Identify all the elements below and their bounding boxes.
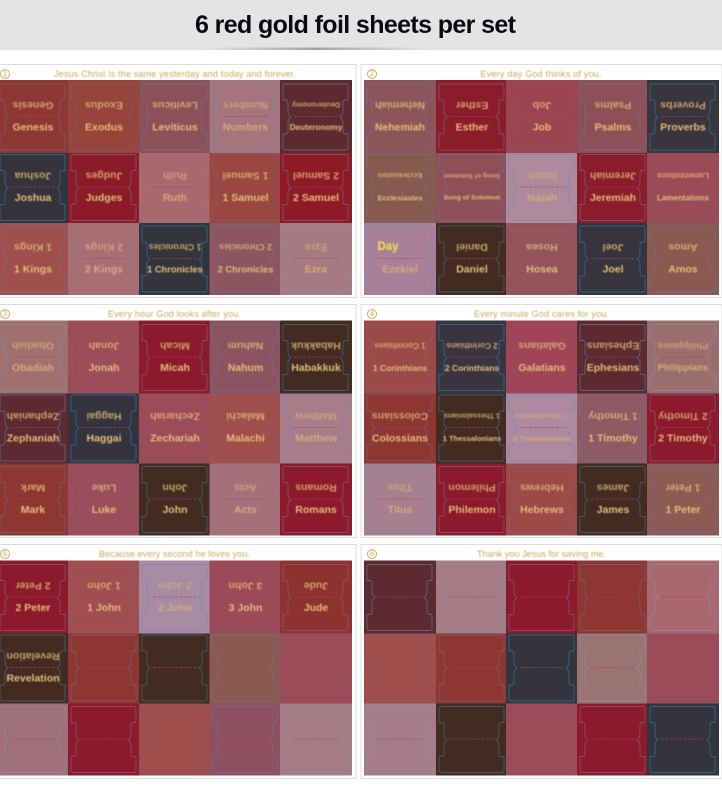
blank tile: row 1 column 2	[436, 560, 508, 634]
caption: sheet 4: Every minute God cares for you.	[474, 309, 609, 319]
panel: sheet 3	[0, 304, 356, 538]
tile: Romans	[280, 464, 352, 536]
tile: 1 Corinthians: 1 Corinthians	[374, 341, 426, 350]
tile: Hebrews: Hebrews	[520, 504, 564, 516]
tile: 1 John	[68, 560, 140, 634]
blank tile: row 2 column 4	[210, 634, 282, 704]
panel: sheet 1	[0, 64, 356, 298]
tile: Galatians	[506, 320, 578, 394]
tile: Zephaniah: Zephaniah	[7, 432, 59, 444]
tile: Joel: Joel	[602, 264, 624, 276]
tile: 2 Timothy	[647, 394, 719, 464]
tile: Isaiah: Isaiah	[527, 170, 557, 182]
tile: James	[577, 464, 649, 536]
tile: Jude	[280, 560, 352, 634]
tile: Mark	[0, 464, 69, 536]
blank tile: row 3 column 4	[577, 704, 649, 776]
tile: Ecclesiastes: Ecclesiastes	[377, 194, 423, 202]
tile: 3 John: 3 John	[229, 580, 262, 592]
tile: Hosea: Hosea	[526, 241, 558, 253]
tile: Colossians: Colossians	[372, 410, 428, 422]
blank tile: row 2 column 4	[577, 634, 649, 704]
blank tile: row 3 column 4	[210, 704, 282, 776]
tile: Isaiah: Isaiah	[527, 192, 557, 204]
tile: James: James	[596, 482, 629, 494]
tile: Hosea: Hosea	[526, 264, 558, 276]
caption: sheet 3: Every hour God looks after you.	[108, 309, 241, 319]
tile: Isaiah	[506, 153, 578, 223]
tile: Lamentations	[647, 153, 719, 223]
tile: Proverbs: Proverbs	[660, 122, 706, 134]
tile: Ephesians: Ephesians	[587, 362, 639, 374]
tile: Jude: Jude	[304, 580, 328, 592]
tile: Nahum: Nahum	[228, 362, 263, 374]
tile: Ezra	[280, 223, 352, 295]
tile: Lamentations: Lamentations	[657, 194, 710, 202]
blank tile: row 3 column 3	[506, 704, 578, 776]
tile: Titus: Titus	[388, 504, 413, 516]
tile: Judges	[68, 153, 140, 223]
tile: Romans: Romans	[295, 482, 337, 494]
tile: Leviticus: Leviticus	[152, 122, 198, 134]
tile: Ezra: Ezra	[305, 264, 327, 276]
tile: 1 Thessalonians: 1 Thessalonians	[443, 434, 501, 443]
tile: Ecclesiastes	[364, 153, 436, 223]
tile: Acts: Acts	[234, 482, 257, 494]
tile: 1 Samuel: 1 Samuel	[222, 192, 269, 204]
tile: 2 Peter: 2 Peter	[15, 602, 51, 614]
tile: Daniel: Daniel	[456, 241, 488, 253]
tile: Zephaniah	[0, 394, 69, 464]
tile: Nahum	[210, 320, 282, 394]
blank tile: row 2 column 2	[436, 634, 508, 704]
tile: Galatians: Galatians	[518, 340, 566, 352]
tile: 3 John	[210, 560, 282, 634]
icon: number 1	[0, 70, 10, 78]
tile: Song of Solomon: Song of Solomon	[444, 172, 500, 179]
tile: Joshua: Joshua	[14, 170, 51, 182]
tile: Philemon: Philemon	[448, 504, 496, 516]
tile: Revelation: Revelation	[6, 650, 60, 662]
tile: 1 Kings: 1 Kings	[14, 241, 52, 253]
tile: Jonah: Jonah	[89, 362, 119, 374]
tile: Daniel	[436, 223, 508, 295]
tile: Leviticus: Leviticus	[152, 99, 198, 111]
tile: 2 Corinthians	[436, 320, 508, 394]
caption: sheet 2: Every day God thinks of you.	[480, 69, 602, 79]
blank tile: row 3 column 1	[364, 704, 436, 776]
tile: Obadiah	[0, 320, 69, 394]
tile: Titus	[364, 464, 436, 536]
tile: 2 Corinthians: 2 Corinthians	[446, 341, 498, 350]
caption: sheet 6: Thank you Jesus for saving me.	[477, 549, 606, 559]
tile: Ezra: Ezra	[305, 241, 327, 253]
tile: Ezekiel with Day label	[364, 223, 436, 295]
tile: Matthew: Matthew	[294, 410, 337, 422]
tile: 1 Corinthians	[364, 320, 436, 394]
tile: Habakkuk	[280, 320, 352, 394]
tile: Amos	[647, 223, 719, 295]
tile: 2 Chronicles: 2 Chronicles	[218, 264, 273, 274]
tile: Jeremiah	[577, 153, 649, 223]
tile: 1 Timothy: 1 Timothy	[588, 432, 638, 444]
tile: 1 Thessalonians: 1 Thessalonians	[444, 412, 500, 420]
panel: sheet 2	[361, 64, 722, 298]
tile: Luke: Luke	[92, 504, 116, 516]
icon: number 2	[368, 70, 376, 78]
icon: number 3: 3	[3, 310, 8, 318]
tile: Philemon: Philemon	[448, 482, 496, 494]
tile: Romans: Romans	[295, 504, 337, 516]
tile: Ezekiel with Day label: Day	[377, 241, 399, 253]
tile: 2 Corinthians: 2 Corinthians	[445, 363, 499, 373]
tile: Ruth	[139, 153, 211, 223]
tile: 2 Samuel	[280, 153, 352, 223]
tile: 1 Peter	[647, 464, 719, 536]
icon: number 3	[0, 310, 10, 318]
tile: Ruth: Ruth	[163, 192, 187, 204]
tile: James: James	[597, 504, 630, 516]
blank tile: row 1 column 5	[647, 560, 719, 634]
tile: Philippians	[647, 320, 719, 394]
tile: 2 Thessalonians: 2 Thessalonians	[514, 412, 570, 420]
tile: Daniel: Daniel	[456, 264, 488, 276]
tile: Zephaniah: Zephaniah	[7, 410, 59, 422]
blank tile: row 2 column 5	[280, 634, 352, 704]
tile: Amos: Amos	[668, 241, 698, 253]
icon: number 5: 5	[3, 550, 8, 558]
tile: Galatians: Galatians	[518, 362, 566, 374]
tile: 1 Peter: 1 Peter	[665, 482, 701, 494]
tile: Jonah: Jonah	[89, 340, 119, 352]
tile: Nehemiah: Nehemiah	[375, 122, 425, 134]
tile: Nehemiah	[364, 80, 436, 153]
panel: sheet 5	[0, 544, 356, 778]
tile: Leviticus	[139, 80, 211, 153]
tile: Colossians	[364, 394, 436, 464]
tile: Genesis: Genesis	[13, 122, 54, 134]
tile: Philemon	[436, 464, 508, 536]
tile: Obadiah: Obadiah	[12, 340, 54, 352]
icon: number 4	[368, 310, 376, 318]
tile: 1 Chronicles	[139, 223, 211, 295]
tile: Haggai	[68, 394, 140, 464]
icon: number 1: 1	[3, 70, 8, 78]
tile: Esther: Esther	[456, 122, 488, 134]
tile: 2 Kings: 2 Kings	[85, 241, 123, 253]
blank tile: row 3 column 2	[68, 704, 140, 776]
tile: Deuteronomy: Deuteronomy	[290, 123, 343, 132]
tile: Genesis	[0, 80, 69, 153]
blank tile: row 2 column 5	[647, 634, 719, 704]
tile: 1 Corinthians: 1 Corinthians	[373, 363, 427, 373]
tile: Ephesians: Ephesians	[587, 340, 639, 352]
icon: number 6: 6	[370, 550, 375, 558]
tile: 2 Timothy: 2 Timothy	[658, 410, 708, 422]
tile: 2 Samuel: 2 Samuel	[293, 192, 339, 204]
tile: Esther: Esther	[456, 99, 488, 111]
tile: Genesis: Genesis	[12, 99, 53, 111]
tile: Haggai: Haggai	[86, 410, 122, 422]
tile: Luke: Luke	[92, 482, 116, 494]
blank tile: row 3 column 3	[139, 704, 211, 776]
tile: John: John	[162, 504, 188, 516]
tile: Proverbs: Proverbs	[660, 99, 706, 111]
tile: 1 John: 1 John	[87, 580, 121, 592]
tile: Titus: Titus	[387, 482, 412, 494]
tile: 1 John: 1 John	[87, 602, 121, 614]
tile: 3 John: 3 John	[229, 602, 262, 614]
tile: Malachi: Malachi	[226, 432, 265, 444]
blank tile: row 1 column 1	[364, 560, 436, 634]
blank tile: row 1 column 4	[577, 560, 649, 634]
tile: Proverbs	[647, 80, 719, 153]
tile: Hebrews: Hebrews	[520, 482, 564, 494]
tile: Joel	[577, 223, 649, 295]
tile: Acts	[210, 464, 282, 536]
tile: 1 Kings: 1 Kings	[14, 264, 52, 276]
blank tile: row 1 column 3	[506, 560, 578, 634]
tile: Philippians: Philippians	[658, 340, 708, 351]
tile: Acts: Acts	[234, 504, 257, 516]
tile: 2 Thessalonians	[506, 394, 578, 464]
tile: Song of Solomon	[436, 153, 508, 223]
tile: Judges: Judges	[85, 170, 122, 182]
tile: Hebrews	[506, 464, 578, 536]
tile: Exodus: Exodus	[85, 99, 123, 111]
tile: 2 Chronicles: 2 Chronicles	[219, 242, 272, 252]
title: 6 red gold foil sheets per set	[195, 11, 517, 39]
tile: Malachi	[210, 394, 282, 464]
tile: Joshua	[0, 153, 69, 223]
tile: Micah	[139, 320, 211, 394]
tile: Nehemiah: Nehemiah	[375, 99, 425, 111]
tile: 1 Timothy	[577, 394, 649, 464]
tile: Song of Solomon: Song of Solomon	[444, 194, 500, 202]
tile: Joel: Joel	[602, 241, 624, 253]
tile: 1 Chronicles: 1 Chronicles	[149, 242, 201, 252]
tile: Deuteronomy: Deuteronomy	[291, 100, 340, 110]
tile: Jude: Jude	[304, 602, 328, 614]
tile: 2 John	[139, 560, 211, 634]
tile: Ephesians	[577, 320, 649, 394]
tile: Hosea	[506, 223, 578, 295]
tile: Numbers: Numbers	[223, 99, 268, 111]
tile: Habakkuk: Habakkuk	[291, 340, 341, 352]
tile: Micah: Micah	[160, 362, 190, 374]
blank tile: row 3 column 5	[280, 704, 352, 776]
tile: Habakkuk: Habakkuk	[291, 362, 341, 374]
tile: Psalms	[577, 80, 649, 153]
blank tile: row 2 column 3	[139, 634, 211, 704]
tile: Numbers: Numbers	[223, 122, 268, 134]
blank tile: row 2 column 3	[506, 634, 578, 704]
tile: 2 Samuel: 2 Samuel	[293, 170, 339, 182]
tile: Ezekiel with Day label: Ezekiel	[382, 264, 418, 276]
tile: 2 Kings: 2 Kings	[85, 264, 123, 276]
tile: Colossians: Colossians	[372, 432, 428, 444]
header band	[0, 0, 722, 50]
tile: Psalms: Psalms	[595, 122, 632, 134]
tile: Luke	[68, 464, 140, 536]
icon: number 6	[368, 550, 376, 558]
tile: Zechariah	[139, 394, 211, 464]
icon: number 4: 4	[370, 310, 375, 318]
tile: Exodus: Exodus	[85, 122, 123, 134]
tile: Mark: Mark	[21, 504, 45, 516]
blank tile: row 3 column 1	[0, 704, 69, 776]
tile: 1 Samuel	[210, 153, 282, 223]
tile: Jeremiah: Jeremiah	[590, 170, 636, 182]
tile: Matthew: Matthew	[295, 432, 338, 444]
blank tile: row 3 column 5	[647, 704, 719, 776]
tile: Lamentations: Lamentations	[656, 171, 709, 180]
caption: sheet 1: Jesus Christ is the same yesterday and today and forever.	[54, 69, 296, 79]
tile: Zechariah: Zechariah	[150, 432, 200, 444]
tile: 1 Timothy: 1 Timothy	[588, 410, 638, 422]
tile: Nahum: Nahum	[228, 340, 263, 352]
tile: Revelation: Revelation	[6, 672, 60, 684]
tile: Job	[506, 80, 578, 153]
tile: 2 Thessalonians: 2 Thessalonians	[513, 434, 571, 443]
tile: Numbers	[210, 80, 282, 153]
tile: John	[139, 464, 211, 536]
tile: 2 John: 2 John	[158, 580, 192, 592]
tile: Mark: Mark	[21, 482, 45, 494]
tile: 2 John: 2 John	[158, 602, 192, 614]
tile: 2 Kings	[68, 223, 140, 295]
tile: 2 Peter	[0, 560, 69, 634]
tile: 2 Timothy: 2 Timothy	[658, 432, 708, 444]
tile: Matthew	[280, 394, 352, 464]
icon: number 5	[0, 550, 10, 558]
tile: 1 Thessalonians	[436, 394, 508, 464]
tile: Jeremiah: Jeremiah	[590, 192, 636, 204]
tile: Jonah	[68, 320, 140, 394]
tile: Ecclesiastes: Ecclesiastes	[377, 171, 423, 180]
tile: John: John	[162, 482, 188, 494]
blank tile: row 2 column 1	[364, 634, 436, 704]
tile: Deuteronomy	[280, 80, 352, 153]
tile: 1 Peter: 1 Peter	[665, 504, 701, 516]
tile: Obadiah: Obadiah	[12, 362, 54, 374]
tile: Zechariah: Zechariah	[150, 410, 200, 422]
blank tile: row 2 column 2	[68, 634, 140, 704]
blank tile: row 3 column 2	[436, 704, 508, 776]
tile: 2 Chronicles	[210, 223, 282, 295]
tile: 2 Peter: 2 Peter	[15, 580, 51, 592]
tile: Philippians: Philippians	[658, 362, 708, 374]
tile: Malachi: Malachi	[226, 410, 265, 422]
tile: Job: Job	[533, 99, 551, 111]
tile: Amos: Amos	[668, 264, 698, 276]
tile: Job: Job	[533, 122, 551, 134]
panel: sheet 6	[361, 544, 722, 778]
tile: Ruth: Ruth	[163, 170, 187, 182]
tile: 1 Samuel: 1 Samuel	[222, 170, 269, 182]
tile: Joshua: Joshua	[15, 192, 52, 204]
caption: sheet 5: Because every second he loves you.	[99, 549, 250, 559]
tile: Psalms: Psalms	[594, 99, 631, 111]
tile: Haggai: Haggai	[86, 432, 122, 444]
tile: 1 Kings	[0, 223, 69, 295]
tile: Judges: Judges	[86, 192, 123, 204]
tile: 1 Chronicles: 1 Chronicles	[147, 264, 203, 274]
tile: Exodus	[68, 80, 140, 153]
tile: Micah: Micah	[160, 340, 190, 352]
icon: number 2: 2	[370, 70, 375, 78]
tile: Revelation	[0, 634, 69, 704]
header shadow streak	[200, 48, 430, 50]
panel: sheet 4	[361, 304, 722, 538]
tile: Esther	[436, 80, 508, 153]
